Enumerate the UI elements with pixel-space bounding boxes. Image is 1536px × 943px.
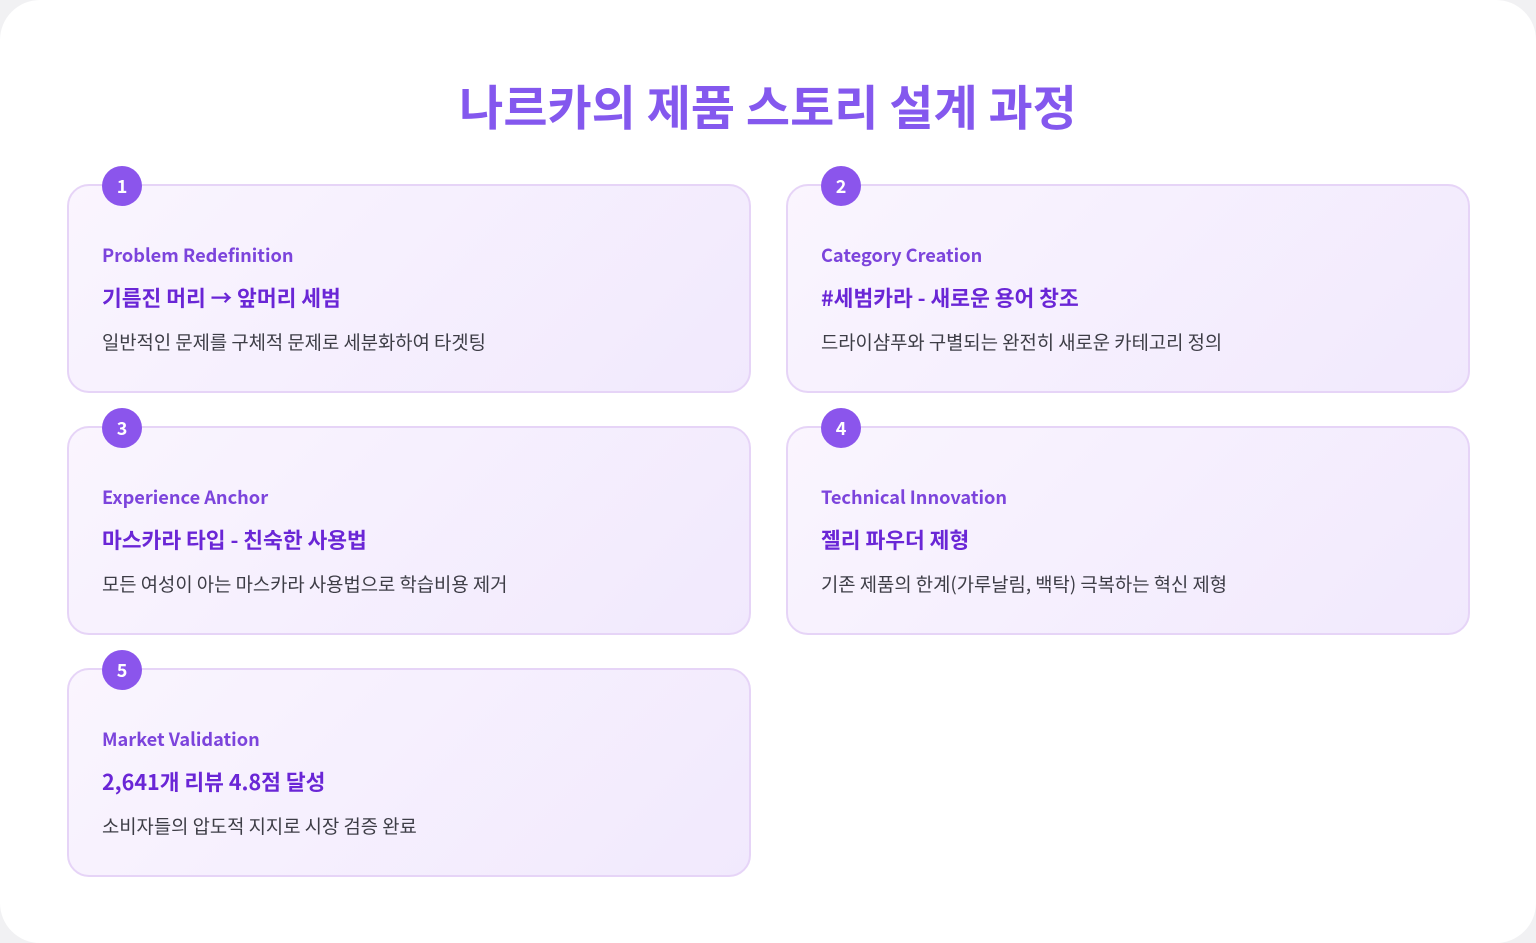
- description: 소비자들의 압도적 지지로 시장 검증 완료: [102, 812, 417, 839]
- panel: step 5: [67, 668, 751, 877]
- label: Technical Innovation: [821, 484, 1007, 510]
- badge 1: 1: [117, 173, 127, 199]
- heading: 젤리 파우더 제형: [821, 524, 969, 555]
- title: 나르카의 제품 스토리 설계 과정: [459, 69, 1077, 139]
- label: Category Creation: [821, 242, 982, 268]
- description: 드라이샴푸와 구별되는 완전히 새로운 카테고리 정의: [821, 328, 1222, 355]
- badge 5: 5: [117, 657, 127, 683]
- heading: 마스카라 타입 - 친숙한 사용법: [102, 524, 367, 555]
- description: 일반적인 문제를 구체적 문제로 세분화하여 타겟팅: [102, 328, 486, 355]
- badge 4: [821, 408, 861, 448]
- heading: 2,641개 리뷰 4.8점 달성: [102, 766, 325, 797]
- label: Problem Redefinition: [102, 242, 294, 268]
- badge 5: [102, 650, 142, 690]
- panel: step 3: [67, 426, 751, 635]
- badge 4: 4: [836, 415, 846, 441]
- badge 3: 3: [117, 415, 127, 441]
- heading: 기름진 머리 → 앞머리 세범: [102, 282, 341, 313]
- description: 기존 제품의 한계(가루날림, 백탁) 극복하는 혁신 제형: [821, 570, 1227, 597]
- description: 모든 여성이 아는 마스카라 사용법으로 학습비용 제거: [102, 570, 507, 597]
- label: Experience Anchor: [102, 484, 268, 510]
- badge 3: [102, 408, 142, 448]
- label: Market Validation: [102, 726, 260, 752]
- panel: step 2: [786, 184, 1470, 393]
- badge 2: [821, 166, 861, 206]
- heading: #세범카라 - 새로운 용어 창조: [821, 282, 1079, 313]
- badge 2: 2: [836, 173, 846, 199]
- panel: step 1: [67, 184, 751, 393]
- panel: step 4: [786, 426, 1470, 635]
- badge 1: [102, 166, 142, 206]
